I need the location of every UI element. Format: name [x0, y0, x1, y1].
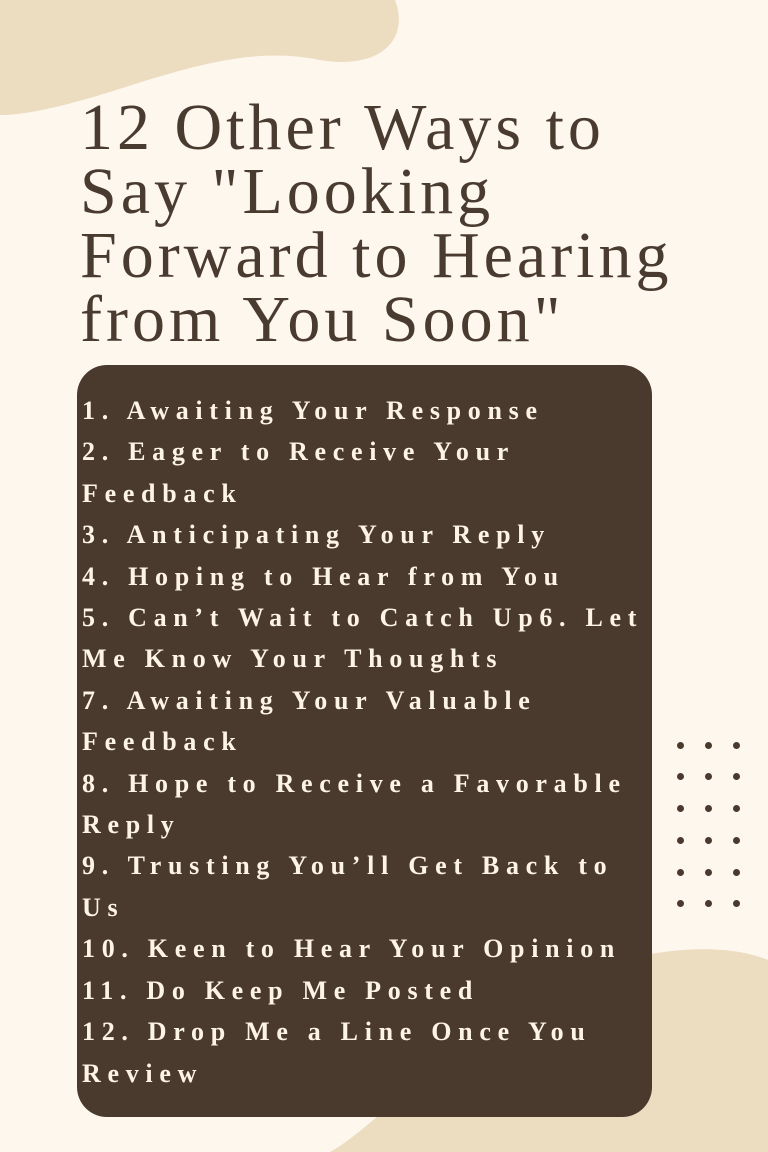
- list text: Reply: [82, 810, 180, 839]
- blob: bottom-right: [330, 949, 768, 1152]
- list text: 2. Eager to Receive Your: [82, 437, 515, 466]
- list text: Feedback: [82, 479, 242, 508]
- title: from You Soon": [80, 283, 565, 356]
- list text: [82, 396, 643, 1088]
- list text: Me Know Your Thoughts: [82, 644, 503, 673]
- list text: 11. Do Keep Me Posted: [82, 976, 479, 1005]
- list text: 4. Hoping to Hear from You: [82, 562, 565, 591]
- list text: 3. Anticipating Your Reply: [82, 520, 551, 549]
- blob: top-left: [0, 0, 399, 115]
- list text: 9. Trusting You’ll Get Back to: [82, 851, 613, 880]
- list text: 12. Drop Me a Line Once You: [82, 1017, 592, 1046]
- list text: Feedback: [82, 727, 242, 756]
- list text: 7. Awaiting Your Valuable: [82, 686, 537, 715]
- panel: list: [77, 365, 652, 1117]
- dot grid: [677, 742, 740, 907]
- list text: Us: [82, 893, 124, 922]
- list text: 8. Hope to Receive a Favorable: [82, 769, 627, 798]
- list text: Review: [82, 1058, 203, 1088]
- title: Say "Looking: [80, 155, 494, 228]
- list text: 1. Awaiting Your Response: [82, 396, 544, 425]
- title: [80, 91, 673, 356]
- title: Forward to Hearing: [80, 219, 673, 292]
- list text: 10. Keen to Hear Your Opinion: [82, 934, 621, 963]
- list text: 5. Can’t Wait to Catch Up6. Let: [82, 603, 643, 632]
- title: 12 Other Ways to: [80, 91, 605, 164]
